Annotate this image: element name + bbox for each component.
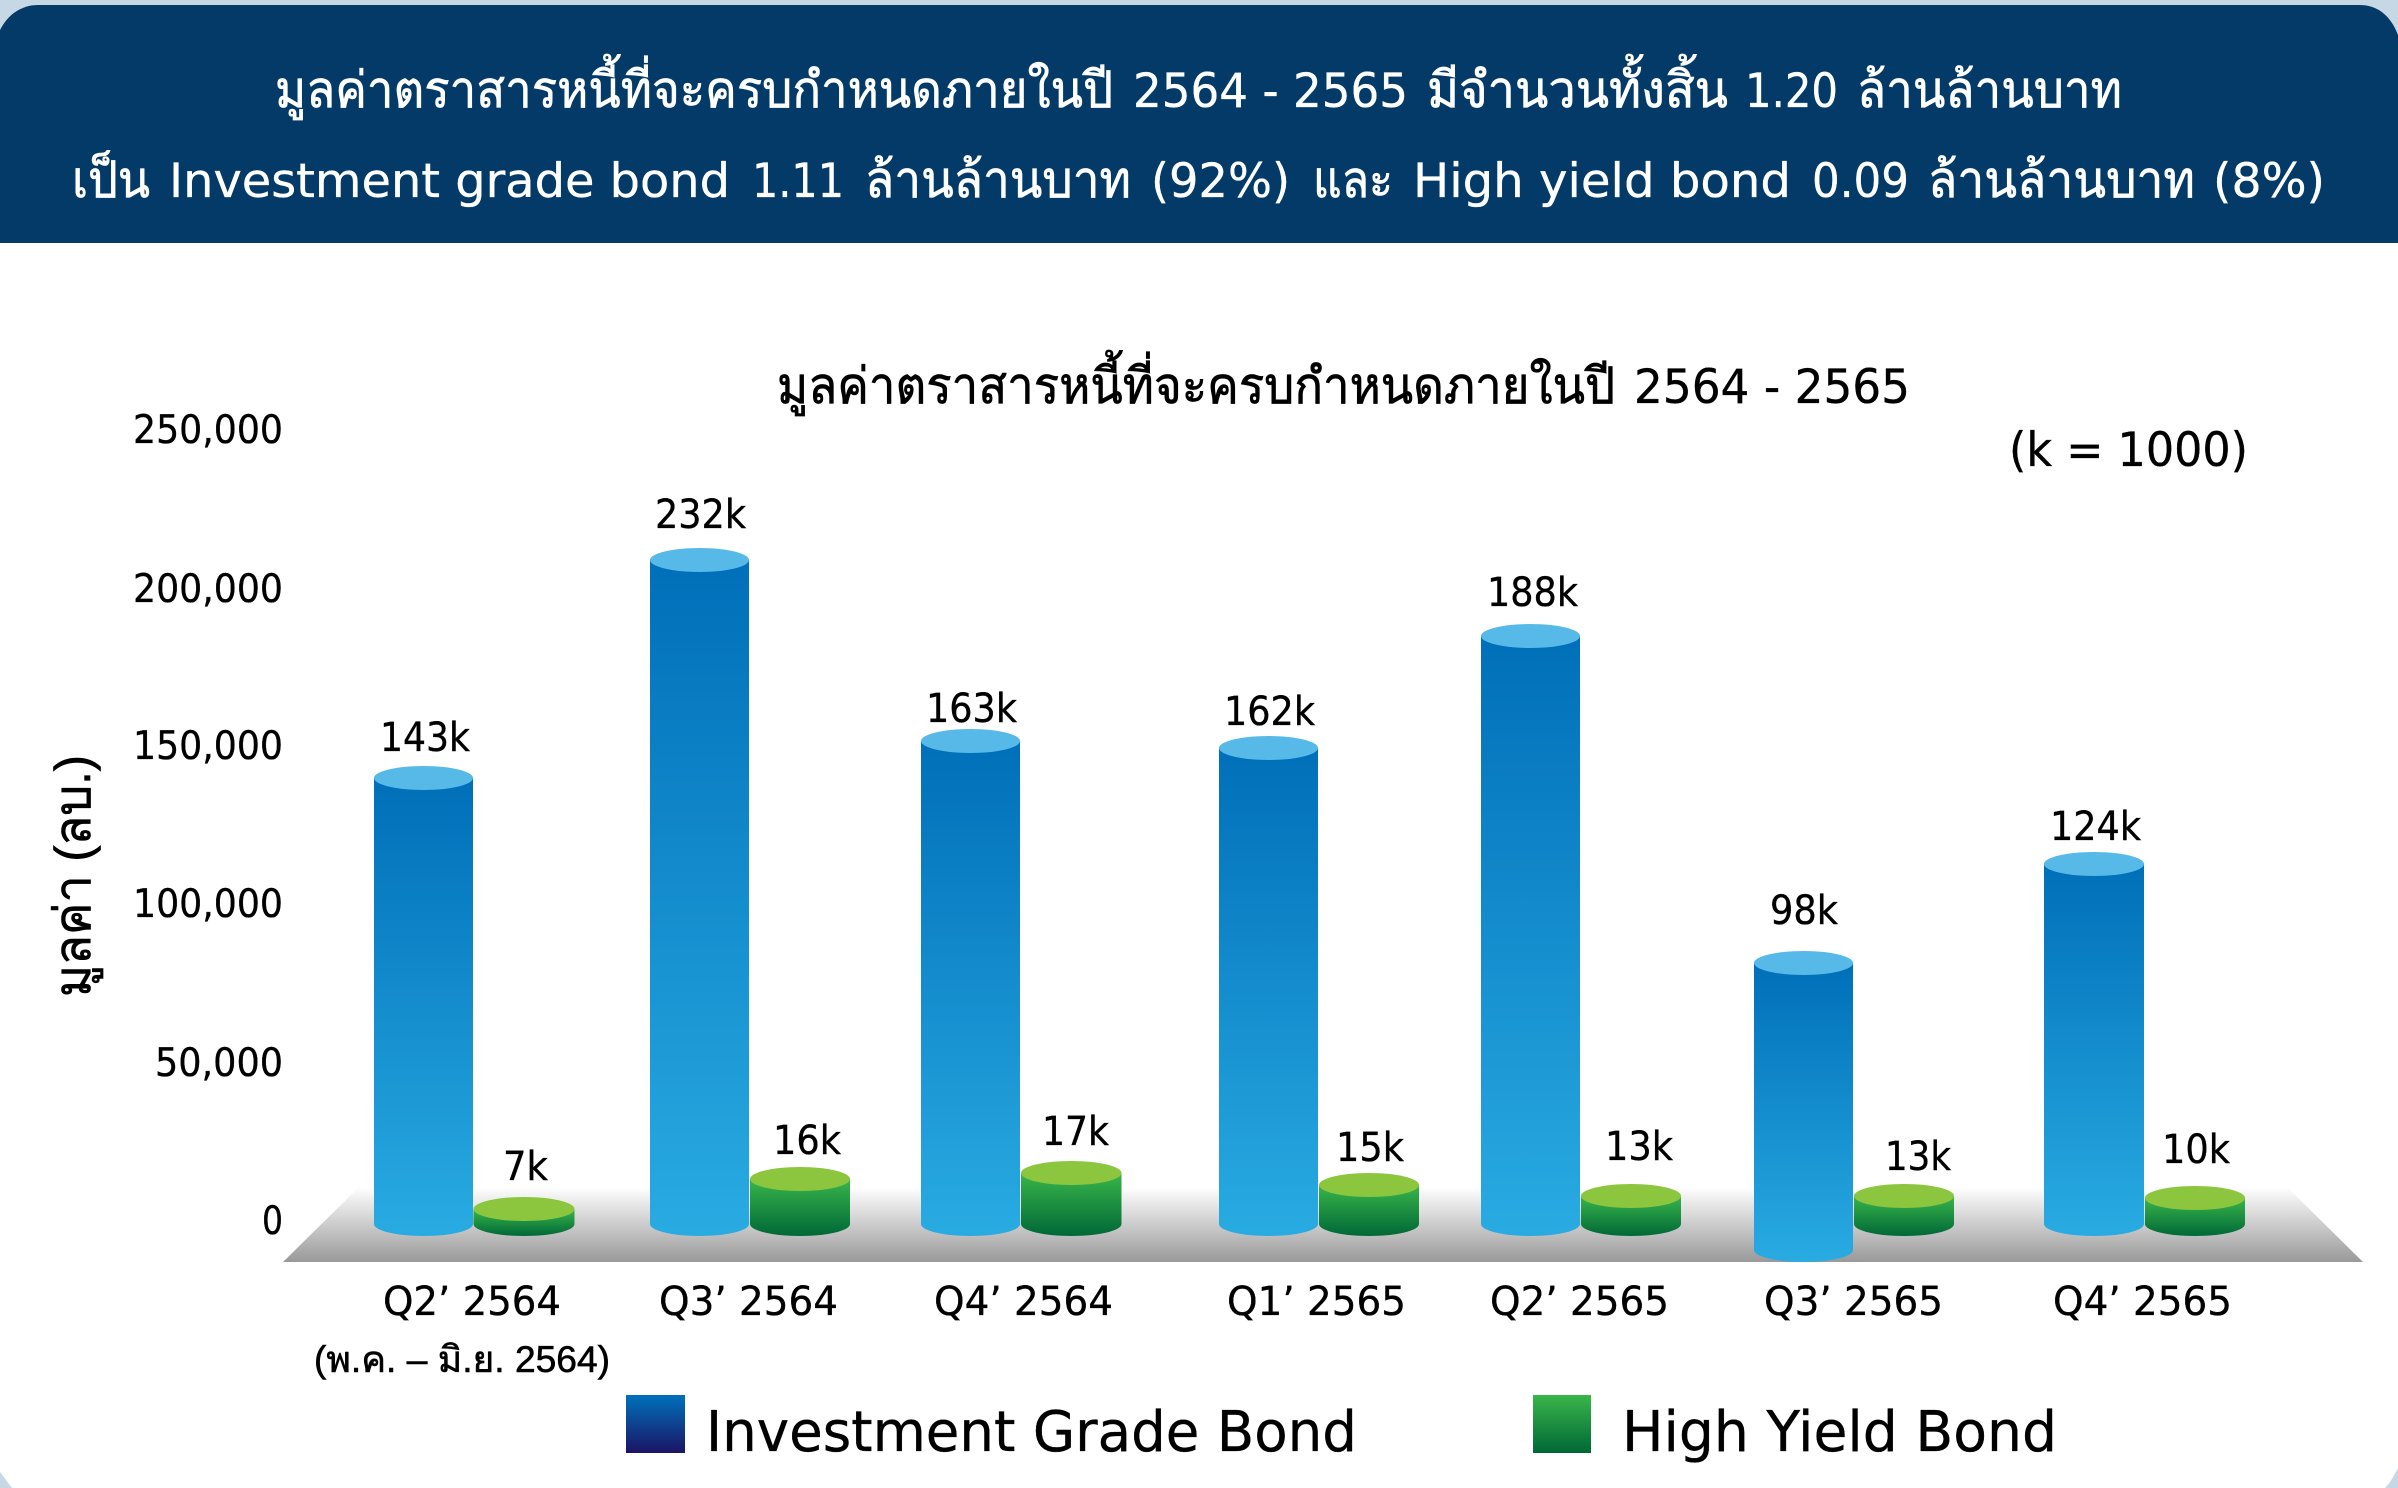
unit note: (k = 1000) (2009, 423, 2248, 478)
chart title: 2564 - 2565 (1634, 360, 1910, 415)
Q3 2565 investment grade bar: 98k (1770, 888, 1839, 934)
header line 2: 1.11 (752, 154, 844, 209)
Q1 2565 investment grade bar (1219, 689, 1318, 1236)
header line 1: 2564 - 2565 (1133, 64, 1408, 119)
header line 2: ล้านล้านบาท (865, 152, 1131, 208)
Q3 2565 high yield bar: 13k (1885, 1134, 1952, 1180)
panel: header banner (0, 5, 2398, 243)
Q1 2565 high yield bar: 15k (1336, 1125, 1405, 1171)
x-axis labels (314, 1279, 2232, 1380)
x-axis labels: Q3’ 2564 (659, 1279, 838, 1325)
Q4 2564 high yield bar: 17k (1042, 1109, 1110, 1155)
Q4 2564 investment grade bar (921, 686, 1020, 1236)
y-axis labels: 0 (262, 1199, 283, 1244)
header line 1 (275, 54, 2122, 120)
x-axis labels: Q1’ 2565 (1227, 1279, 1406, 1325)
header line 2: 0.09 (1812, 154, 1909, 209)
Q4 2565 investment grade bar: 124k (2050, 804, 2142, 850)
Q2 2565 investment grade bar (1481, 570, 1580, 1236)
header line 2: และ (1313, 152, 1393, 208)
header line 1: มูลค่าตราสารหนี้ที่จะครบกำหนดภายในปี (275, 54, 1113, 120)
Q1 2565 high yield bar (1319, 1125, 1419, 1236)
legend swatch: investment grade (626, 1395, 685, 1453)
header line 2: Investment grade bond (169, 154, 730, 209)
Q2 2565 investment grade bar: 188k (1487, 570, 1579, 616)
Q3 2564 investment grade bar: 232k (655, 492, 747, 538)
Q4 2564 high yield bar (1021, 1109, 1122, 1236)
y-axis labels: 50,000 (155, 1041, 283, 1086)
header line 1: มีจำนวนทั้งสิ้น (1427, 54, 1728, 118)
Q2 2565 high yield bar: 13k (1605, 1124, 1674, 1170)
x-axis labels: Q4’ 2565 (2053, 1279, 2232, 1325)
header line 2: High yield bond (1413, 154, 1791, 209)
x-axis labels: Q4’ 2564 (934, 1279, 1113, 1325)
chart floor (283, 1187, 2363, 1262)
Q2 2564 high yield bar (474, 1144, 574, 1236)
x-axis labels: Q3’ 2565 (1764, 1279, 1943, 1325)
y-axis title: มูลค่า (ลบ.) (45, 755, 103, 997)
Q4 2565 investment grade bar (2044, 804, 2144, 1236)
Q3 2564 high yield bar (750, 1118, 850, 1236)
chart title (777, 350, 1910, 416)
y-axis labels: 200,000 (133, 567, 283, 612)
legend (626, 1395, 2057, 1465)
Q3 2564 high yield bar: 16k (773, 1118, 842, 1164)
y-axis labels: 250,000 (133, 408, 283, 453)
date range note: (พ.ค. – มิ.ย. 2564) (314, 1339, 610, 1380)
header line 1: ล้านล้านบาท (1857, 62, 2122, 118)
Q2 2564 investment grade bar: 143k (380, 715, 471, 761)
header line 2: (8%) (2213, 154, 2325, 209)
legend label: high yield: High Yield Bond (1622, 1400, 2057, 1465)
header line 2 (72, 150, 2325, 209)
Q4 2565 high yield bar (2145, 1127, 2245, 1236)
Q1 2565 investment grade bar: 162k (1224, 689, 1316, 735)
Q4 2564 investment grade bar: 163k (926, 686, 1018, 732)
header line 1: 1.20 (1745, 64, 1838, 119)
Q2 2564 high yield bar: 7k (503, 1144, 549, 1190)
y-axis labels: 100,000 (133, 882, 283, 927)
header line 2: (92%) (1151, 154, 1290, 209)
header line 2: เป็น (72, 150, 150, 208)
x-axis labels: Q2’ 2564 (383, 1279, 561, 1325)
legend swatch: high yield (1533, 1395, 1591, 1453)
y-axis labels (133, 408, 283, 1244)
legend label: investment grade: Investment Grade Bond (706, 1400, 1357, 1465)
x-axis labels: Q2’ 2565 (1490, 1279, 1669, 1325)
chart title: มูลค่าตราสารหนี้ที่จะครบกำหนดภายในปี (777, 350, 1615, 416)
Q4 2565 high yield bar: 10k (2162, 1127, 2231, 1173)
y-axis labels: 150,000 (133, 724, 283, 769)
Q3 2565 investment grade bar (1754, 888, 1853, 1262)
bar chart (283, 492, 2363, 1262)
Q2 2564 investment grade bar (374, 715, 473, 1236)
Q3 2565 high yield bar (1854, 1134, 1954, 1236)
Q2 2565 high yield bar (1581, 1124, 1681, 1236)
Q3 2564 investment grade bar (650, 492, 749, 1236)
header line 2: ล้านล้านบาท (1928, 152, 2195, 208)
